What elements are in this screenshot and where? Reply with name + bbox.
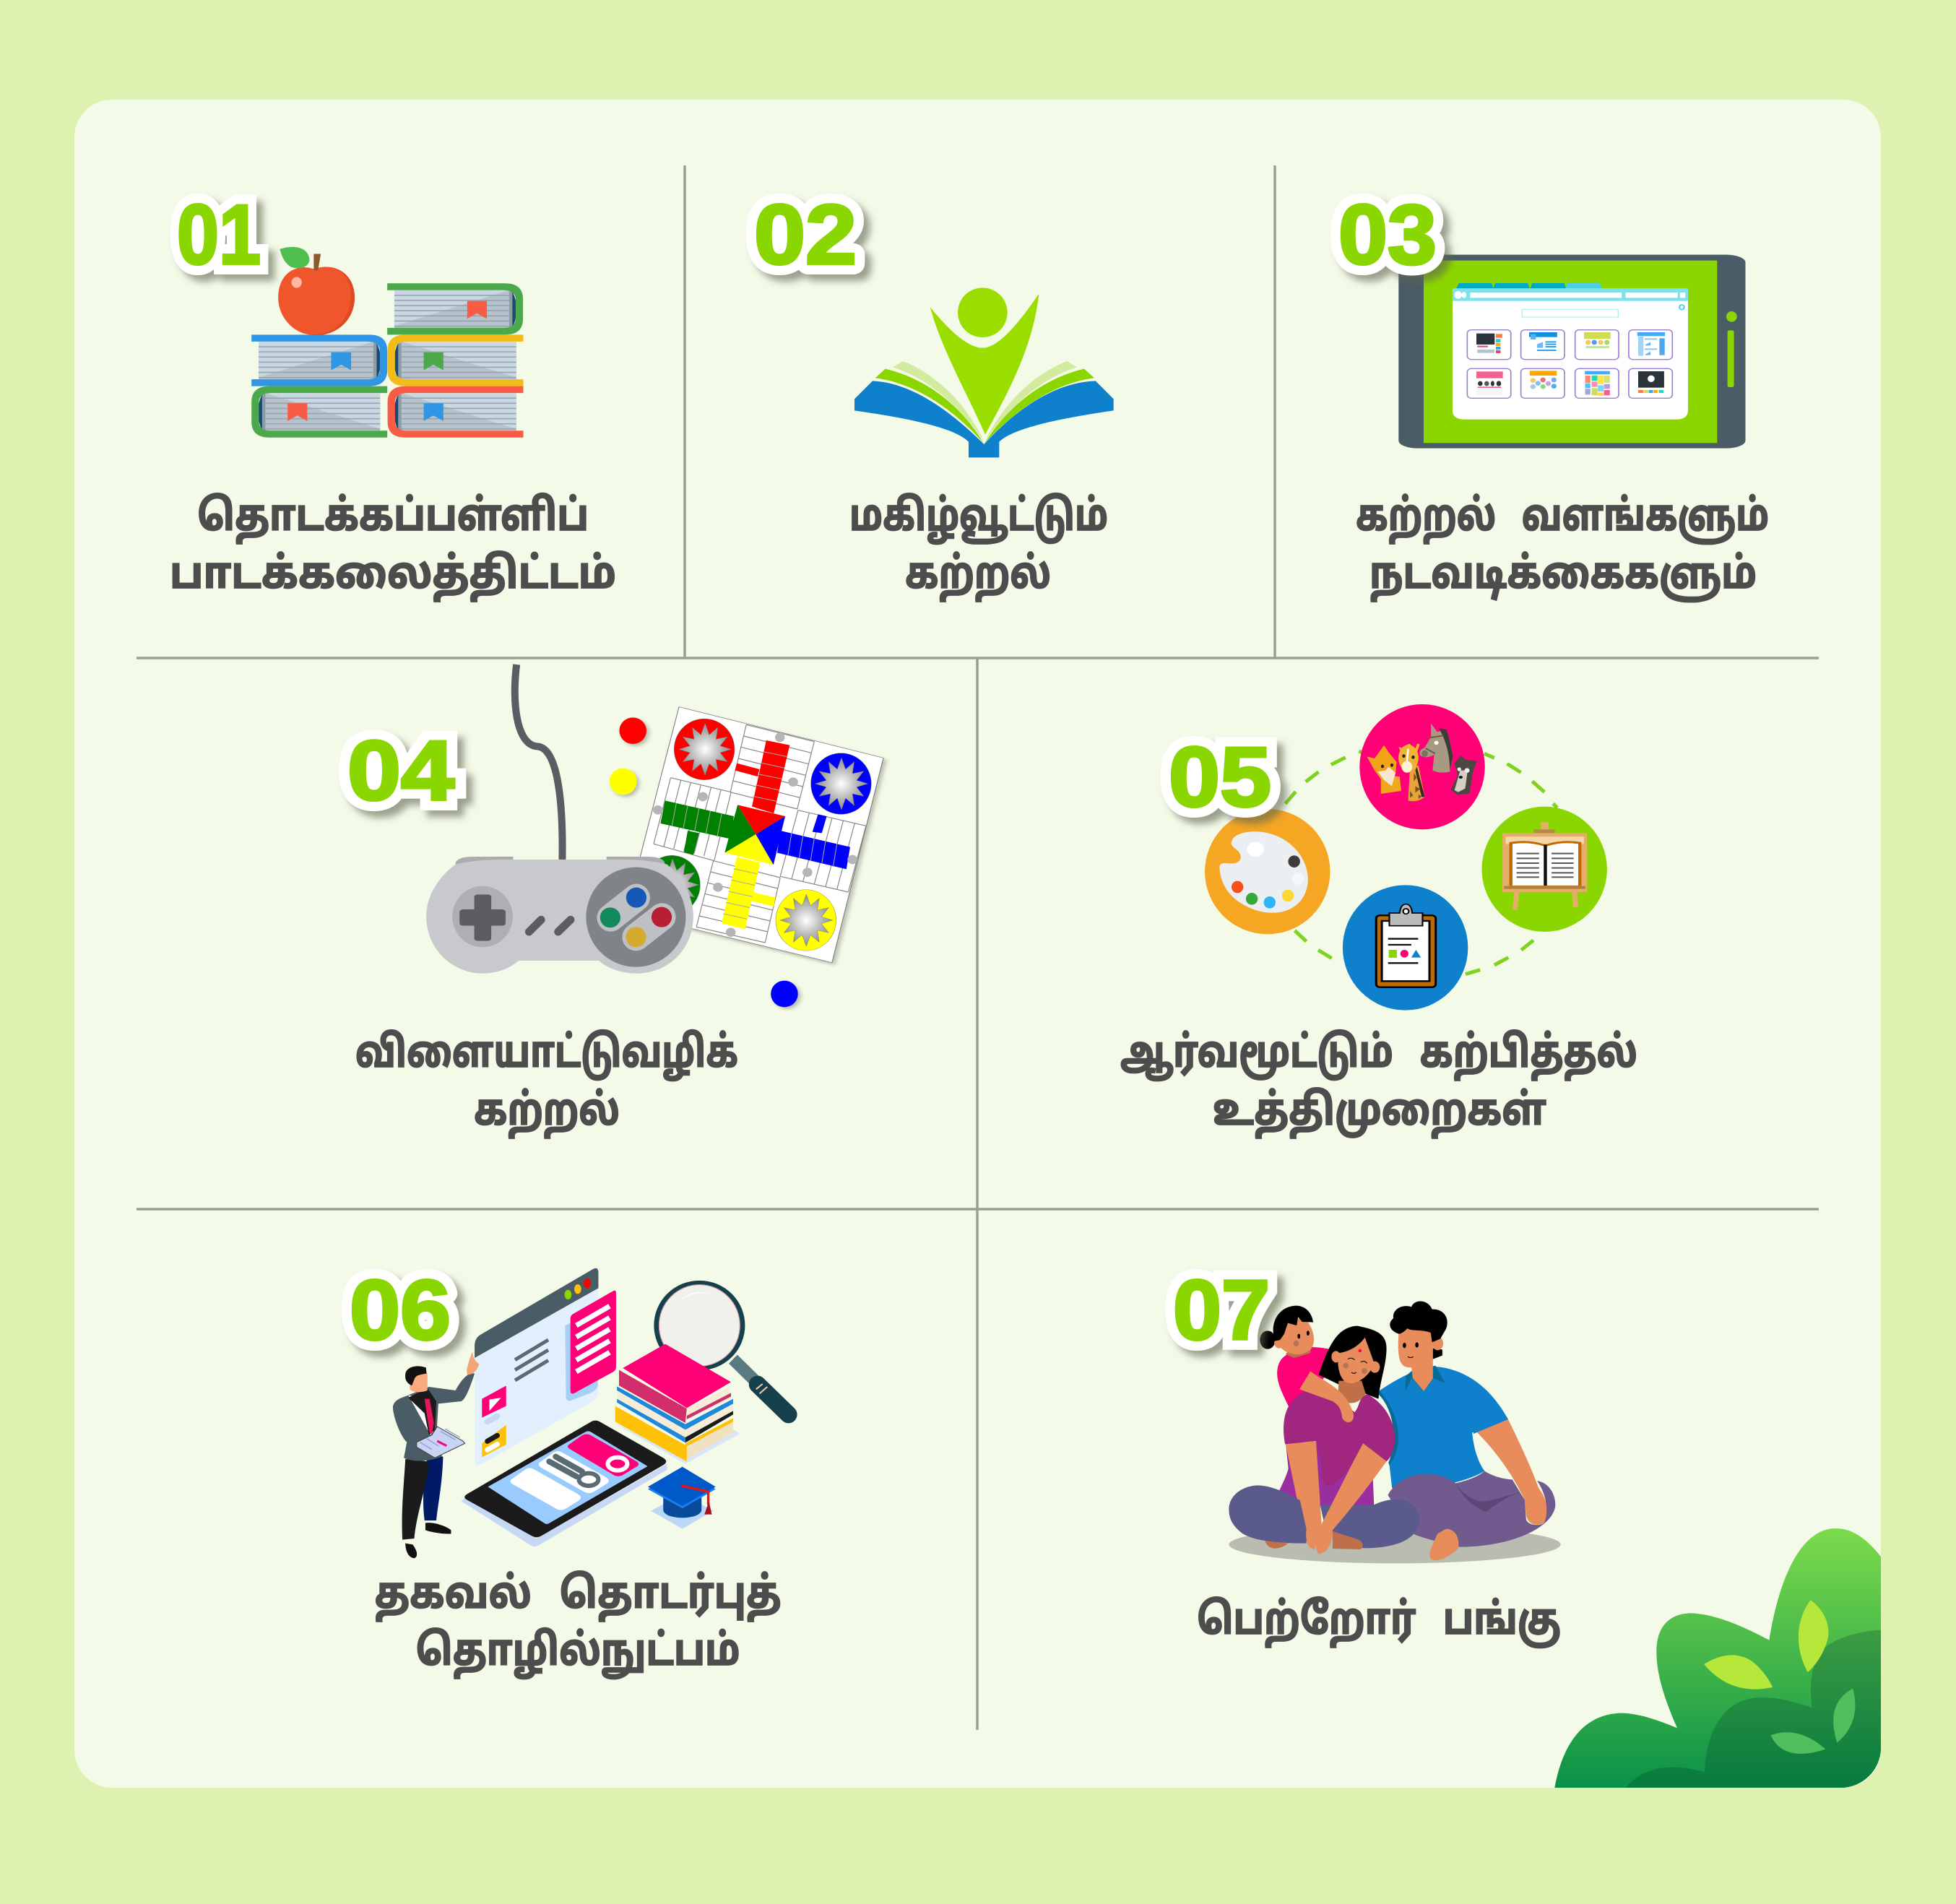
teacher figure (393, 1352, 479, 1558)
icon: ludo board and game controller (426, 665, 883, 1007)
panel 05: stimulating teaching methods (1120, 704, 1637, 1141)
ground shadow (1229, 1526, 1561, 1563)
heading text (1120, 1030, 1637, 1141)
icon: apple on stacked books (251, 247, 524, 438)
ludo board (626, 707, 883, 963)
panel 04: game-based learning (347, 665, 883, 1141)
heading text: கற்றல் (905, 551, 1051, 605)
animal puppets circle (1359, 704, 1485, 829)
magnifying glass (657, 1283, 789, 1414)
graduation cap (648, 1467, 716, 1529)
heading text: தொழில்நுட்பம் (416, 1628, 740, 1682)
open book on easel circle (1481, 807, 1607, 932)
number 06: 06 (350, 1263, 451, 1357)
clipboard circle (1343, 885, 1468, 1011)
father (1378, 1301, 1555, 1560)
paint palette circle (1205, 809, 1330, 934)
number 07: 07 (1173, 1263, 1270, 1357)
heading text: தகவல் தொடர்புத் (374, 1571, 782, 1624)
heading text: ஆர்வமூட்டும் கற்பித்தல் (1120, 1030, 1637, 1083)
heading text (1356, 493, 1769, 605)
number 06: 06 (350, 1263, 451, 1357)
heading text: உத்திமுறைகள் (1213, 1088, 1546, 1141)
icon: person rising from open book (854, 287, 1114, 457)
heading text: பாடக்கலைத்திட்டம் (170, 551, 616, 605)
panel 02: joyful learning (754, 187, 1114, 605)
daughter's arm (1299, 1371, 1354, 1422)
panel 03: learning resources and activities (1338, 187, 1769, 605)
fox puppet (1367, 745, 1401, 794)
mother (1229, 1326, 1419, 1554)
daughter (1260, 1306, 1333, 1406)
heading text: பெற்றோர் பங்கு (1197, 1596, 1561, 1650)
number 07: 07 (1173, 1263, 1270, 1357)
number 04: 04 (347, 723, 454, 818)
icon: ring of teaching method circles (1205, 704, 1607, 1011)
number 03: 03 (1338, 187, 1437, 282)
number 05: 05 (1169, 730, 1271, 824)
giraffe puppet (1398, 744, 1424, 801)
heading text: நடவடிக்கைகளும் (1369, 551, 1757, 605)
heading text: மகிழ்வூட்டும் (849, 493, 1108, 547)
number 02: 02 (754, 187, 857, 282)
game tokens (610, 717, 798, 1007)
smartphone (462, 1421, 667, 1546)
heading text (374, 1571, 782, 1682)
panel 06: information and communication technology (350, 1263, 789, 1682)
heading text: கற்றல் (474, 1088, 620, 1141)
heading text: விளையாட்டுவழிக் (355, 1030, 738, 1083)
heading text: கற்றல் வளங்களும் (1356, 493, 1769, 547)
number 04: 04 (347, 723, 454, 818)
number 03: 03 (1338, 187, 1437, 282)
heading text (355, 1030, 738, 1141)
stack of books (612, 1344, 740, 1464)
number 01: 01 (177, 187, 261, 282)
number 01: 01 (177, 187, 261, 282)
heading text (170, 493, 616, 605)
wolf puppet (1450, 756, 1477, 795)
panel 01: primary school curriculum (170, 187, 616, 605)
heading text: தொடக்கப்பள்ளிப் (197, 493, 589, 547)
decoration: corner leaves (1554, 1528, 1881, 1788)
icon: tablet with browser (1398, 255, 1745, 449)
panel 07: parental role (1173, 1263, 1561, 1650)
browser window (475, 1268, 616, 1466)
horse puppet (1420, 724, 1453, 773)
controller cord (515, 665, 563, 860)
game controller (426, 857, 693, 974)
number 02: 02 (754, 187, 857, 282)
heading text (849, 493, 1108, 605)
number 05: 05 (1169, 730, 1271, 824)
icon: seated family of three (1229, 1301, 1561, 1563)
icon: isometric teacher with browser, phone, books (393, 1268, 789, 1558)
